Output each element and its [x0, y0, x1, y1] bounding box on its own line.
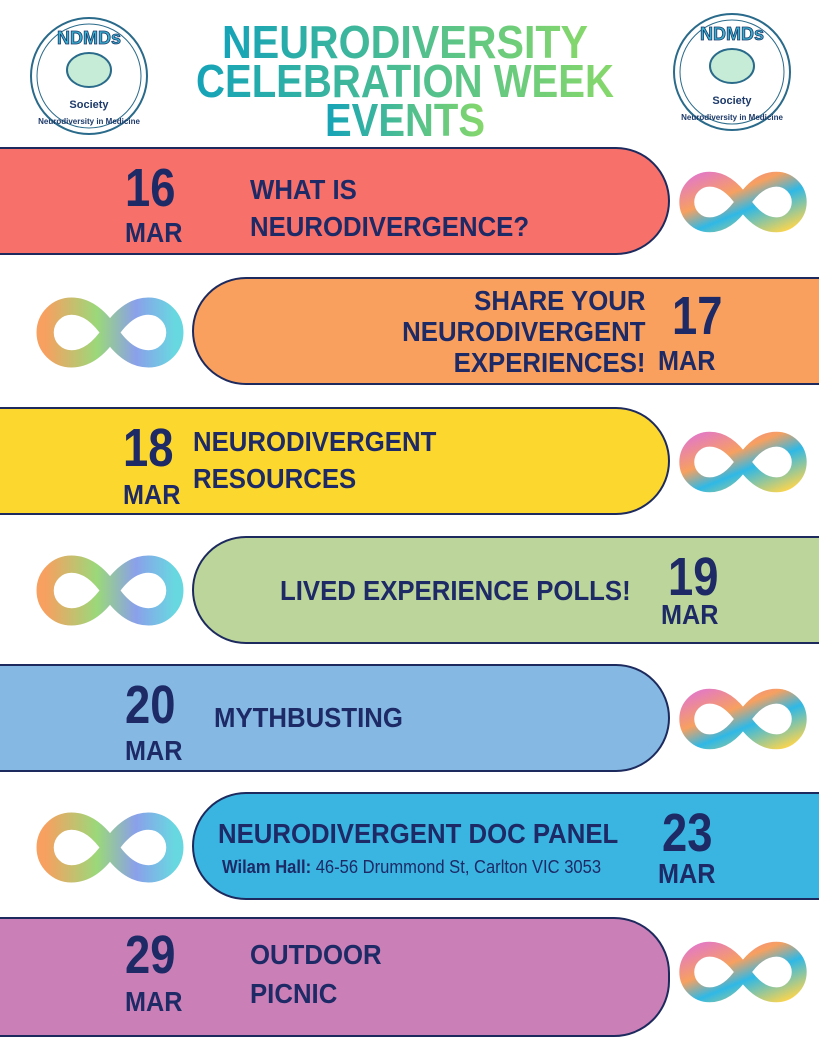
panel 17: EXPERIENCES!: [453, 347, 645, 378]
panel 16: [0, 147, 670, 255]
panel 17: SHARE YOUR: [474, 285, 645, 316]
panel 18: RESOURCES: [193, 463, 356, 494]
panel 18: MAR: [123, 479, 180, 510]
logo right: Society: [712, 95, 752, 107]
panel 16: NEURODIVERGENCE?: [250, 211, 529, 242]
logo right: NDMDs: [700, 24, 764, 44]
panel 19: LIVED EXPERIENCE POLLS!: [280, 575, 631, 606]
panel 16: MAR: [125, 217, 182, 248]
panel 23: Wilam Hall: 46-56 Drummond St, Carlton VIC 3053: [222, 857, 601, 877]
logo right: [673, 13, 791, 131]
panel 29: PICNIC: [250, 978, 337, 1009]
icon right 5: [679, 688, 807, 750]
panel 23: [192, 792, 819, 900]
panel 23: NEURODIVERGENT DOC PANEL: [218, 818, 618, 849]
panel 29: 29: [125, 925, 175, 985]
logo left: [30, 17, 148, 135]
panel 20: [0, 664, 670, 772]
icon left 2: [36, 298, 184, 368]
panel 18: [0, 407, 670, 515]
panel 19: 19: [668, 547, 718, 607]
logo left: Society: [69, 99, 109, 111]
panel 23: 23: [662, 803, 712, 863]
icon right 7: [679, 942, 807, 1002]
icon left 4: [36, 556, 184, 626]
icon left 6: [36, 812, 184, 882]
panel 29: OUTDOOR: [250, 939, 382, 970]
panel 17: 17: [672, 286, 722, 346]
panel 19: [192, 536, 819, 644]
logo left: Neurodiversity in Medicine: [38, 117, 140, 126]
logo right: Neurodiversity in Medicine: [681, 113, 783, 122]
panel 29: [0, 917, 670, 1037]
panel 20: MAR: [125, 735, 182, 766]
panel 29: MAR: [125, 986, 182, 1017]
title: [196, 18, 614, 143]
panel 17: MAR: [658, 345, 715, 376]
panel 16: 16: [125, 158, 175, 218]
logo left: NDMDs: [57, 28, 121, 48]
panel 16: WHAT IS: [250, 174, 357, 205]
panel 18: 18: [123, 418, 173, 478]
panel 18: NEURODIVERGENT: [193, 426, 436, 457]
icon right 3: [679, 432, 807, 492]
panel 17: [192, 277, 819, 385]
panel 20: MYTHBUSTING: [214, 702, 403, 733]
panel 20: 20: [125, 675, 175, 735]
panel 23: MAR: [658, 858, 715, 889]
panel 19: MAR: [661, 599, 718, 630]
panel 17: NEURODIVERGENT: [402, 316, 645, 347]
icon right 1: [679, 172, 807, 232]
